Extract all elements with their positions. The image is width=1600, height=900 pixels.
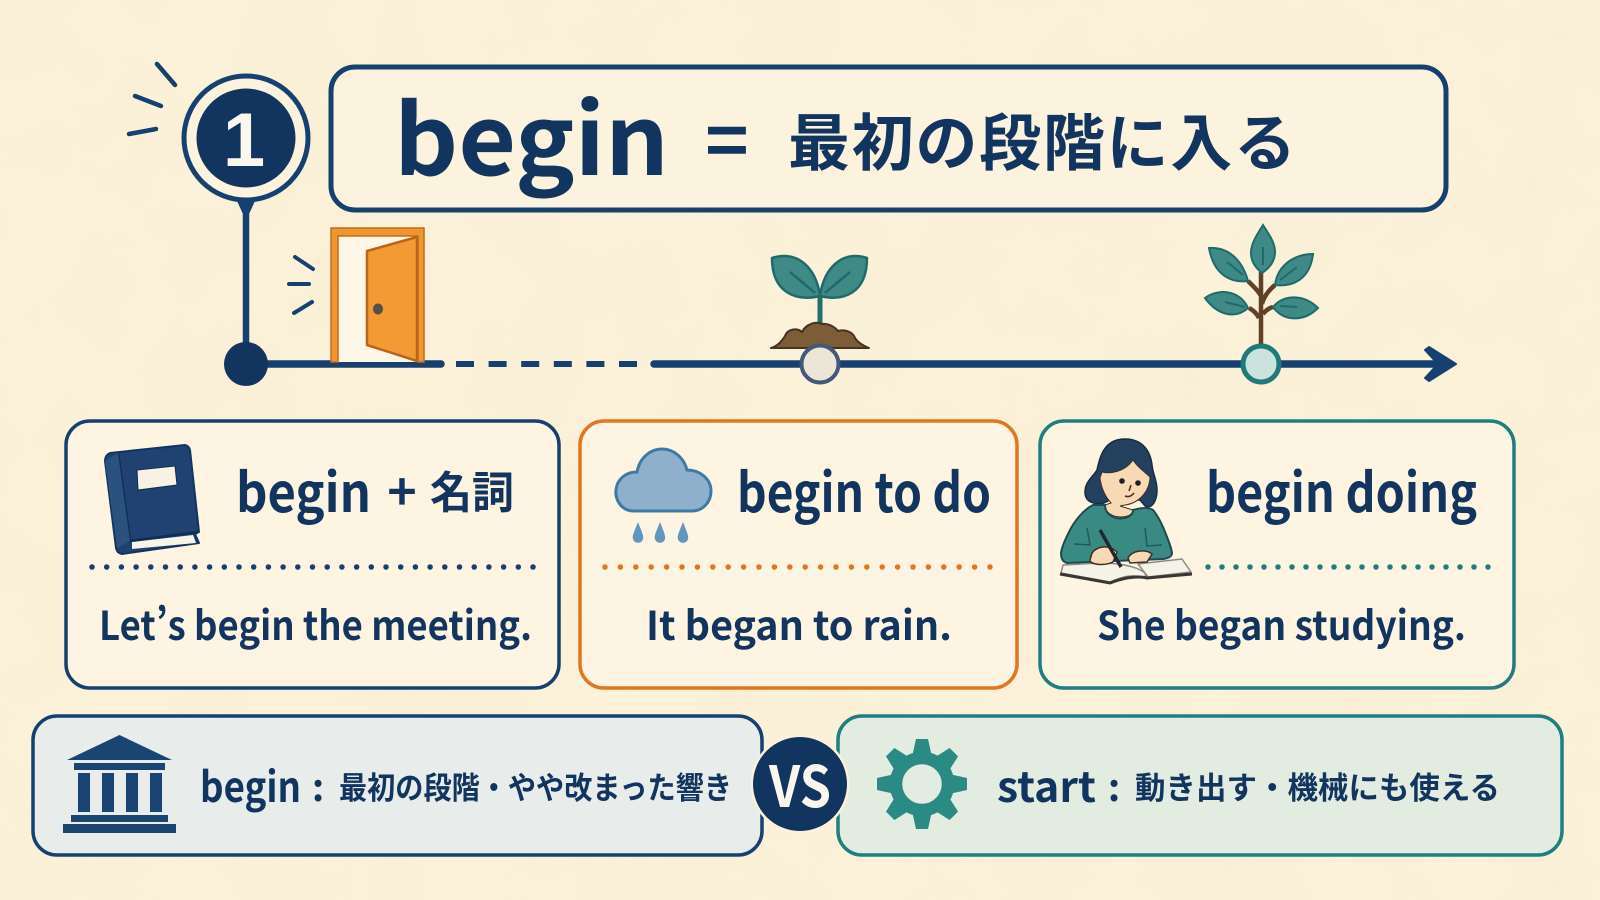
title word: begin (394, 62, 669, 203)
icon: classical building (63, 735, 176, 833)
icon: studying person (1060, 439, 1192, 583)
panel: begin to do (580, 421, 1017, 688)
colon: : (312, 757, 324, 812)
timeline node: sprout (802, 346, 838, 382)
heading: begin to do (737, 449, 991, 528)
heading: + (387, 453, 417, 525)
icon: gear (877, 739, 967, 829)
icon: open door (289, 228, 424, 362)
example: It began to rain. (646, 594, 952, 652)
description: 最初の段階・やや改まった響き (339, 763, 732, 808)
label: start (997, 754, 1096, 815)
example: Let’s begin the meeting. (99, 594, 532, 652)
title meaning: 最初の段階に入る (788, 93, 1296, 183)
equals sign: = (705, 83, 749, 190)
dotted divider (92, 564, 534, 570)
colon: : (1108, 757, 1120, 812)
panel: begin doing (1040, 421, 1514, 688)
label: begin (200, 754, 301, 815)
timeline (224, 195, 1456, 386)
example: She began studying. (1097, 594, 1466, 652)
heading: begin (236, 449, 371, 528)
icon: book (105, 445, 199, 554)
panel: begin comparison (33, 716, 762, 855)
title box (331, 62, 1446, 210)
timeline node: plant (1243, 346, 1279, 382)
vs badge (750, 734, 850, 834)
icon: young plant (1205, 225, 1318, 345)
description: 動き出す・機械にも使える (1135, 763, 1500, 808)
icon: emphasis rays (129, 64, 175, 134)
panel: begin + noun (66, 421, 559, 688)
icon: rain cloud (616, 449, 711, 543)
heading (236, 449, 514, 528)
number badge: 1 (223, 98, 265, 183)
icon: sprout (771, 256, 869, 348)
arrowhead (1425, 347, 1456, 381)
dotted divider (605, 564, 992, 570)
heading: 名詞 (430, 457, 514, 521)
heading: begin doing (1206, 449, 1477, 528)
vs badge: VS (768, 742, 831, 824)
dotted divider (1208, 564, 1490, 570)
panel: start comparison (838, 716, 1562, 855)
number badge (184, 76, 308, 200)
